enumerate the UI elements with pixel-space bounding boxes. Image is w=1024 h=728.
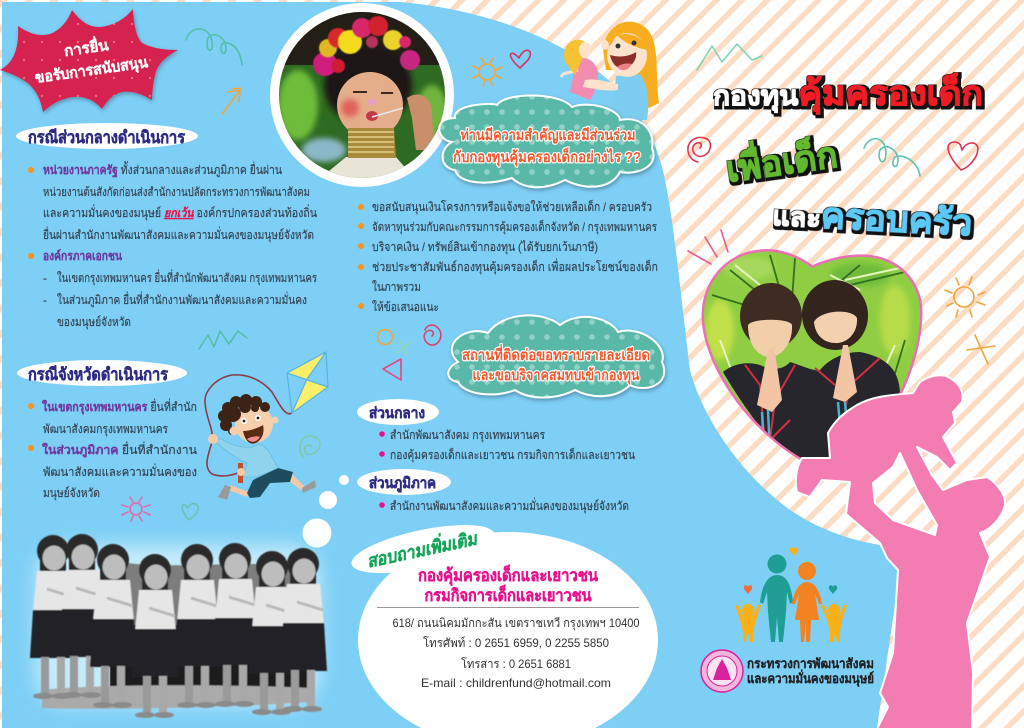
title: เพื่อเด็ก — [723, 129, 840, 190]
photo: girl with flower crown blowing bubbles — [270, 3, 454, 187]
doodles: sun and heart — [122, 436, 320, 521]
title: กองทุนคุ้มครองเด็ก — [713, 72, 983, 115]
doodles: sun and heart top — [473, 50, 530, 86]
text block: provincial list: พัฒนาสังคมกรุงเทพมหานคร — [43, 422, 168, 437]
cloud: how can you participate — [439, 95, 654, 187]
text block: central agency list: ของมนุษย์จังหวัด — [57, 315, 131, 330]
cloud: how can you participate: ท่านมีความสำคัญและมีส่วนร่วม — [460, 127, 636, 144]
cloud: contact place: สถานที่ติดต่อขอทราบรายละเอียด — [462, 344, 650, 364]
text block: ways to participate: ช่วยประชาสัมพันธ์กองทุนคุ้มครองเด็ก เพื่อผลประโยชน์ของเด็ก — [372, 258, 658, 275]
pill heading: central — [357, 399, 439, 425]
text block: provincial list: มนุษย์จังหวัด — [43, 486, 100, 501]
father — [760, 554, 793, 642]
text block: central agency list — [28, 161, 317, 330]
doodle: top green zigzag — [697, 44, 762, 70]
pill heading: central agency: กรณีส่วนกลางดำเนินการ — [28, 127, 186, 147]
contact details — [392, 616, 640, 690]
contact title: กรมกิจการเด็กและเยาวชน — [424, 583, 592, 605]
text block: central offices: สำนักพัฒนาสังคม กรุงเทพมหานคร — [390, 428, 545, 443]
text block: provincial list: ในเขตกรุงเทพมหานคร ยื่นที่สำนัก — [42, 398, 197, 415]
silhouette: parent lifting child — [796, 375, 1005, 728]
contact details: โทรศัพท์ : 0 2651 6959, 0 2255 5850 — [423, 636, 609, 650]
text block: central offices: กองคุ้มครองเด็กและเยาวชน กรมกิจการเด็กและเยาวชน — [390, 447, 635, 463]
burst badge: application heading: การยื่น — [63, 34, 110, 60]
pill heading: regional — [357, 469, 451, 495]
text block: central agency list: ในส่วนภูมิภาค ยื่นที่สำนักงานพัฒนาสังคมและความมั่นคง — [57, 291, 307, 308]
contact details: โทรสาร : 0 2651 6881 — [461, 657, 571, 671]
text block: central agency list: - — [43, 293, 47, 307]
pill heading: central agency — [16, 123, 198, 149]
contact details: 618/ ถนนนิคมมักกะสัน เขตราชเทวี กรุงเทพฯ 10400 — [392, 616, 640, 631]
photo: children in school uniform — [30, 534, 327, 718]
text block: central agency list: และความมั่นคงของมนุษย์ ยกเว้น องค์กรปกครองส่วนท้องถิ่น — [43, 204, 317, 221]
ministry name: กระทรวงการพัฒนาสังคม — [747, 656, 874, 671]
doodles: circle, cross, spiral, triangle — [378, 325, 441, 380]
text block: ways to participate: ในภาพรวม — [372, 280, 421, 294]
doodles: right spiral, coil, heart, rays, sun, cross — [688, 137, 995, 364]
family icon — [735, 547, 847, 642]
doodle: green zigzag — [199, 331, 247, 349]
pill heading: provincial: กรณีจังหวัดดำเนินการ — [28, 364, 169, 384]
text block: regional office: สำนักงานพัฒนาสังคมและความมั่นคงของมนุษย์จังหวัด — [390, 497, 629, 514]
ministry name — [747, 656, 874, 687]
text block: ways to participate: ขอสนับสนุนเงินโครงการหรือแจ้งขอให้ช่วยเหลือเด็ก / ครอบครัว — [372, 199, 652, 215]
tag: further enquiries: สอบถามเพิ่มเติม — [364, 525, 480, 572]
contact details: E-mail : childrenfund@hotmail.com — [421, 676, 611, 690]
text block: ways to participate — [358, 199, 658, 314]
title — [713, 72, 983, 243]
photo: two girls in heart frame — [700, 250, 925, 465]
text block: provincial list: พัฒนาสังคมและความมั่นคงของ — [43, 463, 197, 479]
tag: further enquiries — [348, 515, 498, 583]
pill heading: regional: ส่วนภูมิภาค — [369, 474, 436, 493]
text block: ways to participate: ให้ข้อเสนอแนะ — [372, 300, 439, 314]
doodles: left top — [186, 29, 242, 114]
text block: central offices — [379, 428, 635, 463]
text block: ways to participate: จัดหาทุนร่วมกับคณะกรรมการคุ้มครองเด็กจังหวัด / กรุงเทพมหานคร — [372, 219, 657, 235]
kite and running boy — [205, 352, 328, 500]
cloud: contact place — [448, 315, 664, 398]
text block: ways to participate: บริจาคเงิน / ทรัพย์สินเข้ากองทุน (ได้รับยกเว้นภาษี) — [372, 240, 598, 255]
text block: provincial list: ในส่วนภูมิภาค ยื่นที่สำนักงาน — [42, 441, 197, 458]
text block: central agency list: หน่วยงานภาครัฐ ทั้งส่วนกลางและส่วนภูมิภาค ยื่นผ่าน — [43, 161, 282, 178]
ministry name: และความมั่นคงของมนุษย์ — [747, 669, 874, 687]
text block: regional office — [379, 497, 629, 514]
pill heading: provincial — [17, 360, 187, 386]
text block: central agency list: หน่วยงานต้นสังกัดก่อนส่งสำนักงานปลัดกระทรวงการพัฒนาสังคม — [43, 185, 310, 199]
title: และครอบครัว — [772, 192, 973, 243]
text block: central agency list: องค์กรภาคเอกชน — [43, 249, 123, 263]
thought bubbles — [302, 475, 349, 548]
text block: central agency list: - — [43, 271, 47, 285]
text block: central agency list: ยื่นผ่านสำนักงานพัฒนาสังคมและความมั่นคงของมนุษย์จังหวัด — [43, 226, 314, 243]
contact title: กองคุ้มครองเด็กและเยาวชน — [418, 563, 598, 586]
cloud: contact place: และขอบริจาคสมทบเข้ากองทุน — [472, 366, 640, 385]
burst badge: application heading: ขอรับการสนับสนุน — [34, 54, 150, 88]
cartoon: girl lifting baby — [561, 22, 659, 120]
ministry seal — [701, 650, 743, 692]
burst badge: application heading — [0, 9, 178, 112]
pill heading: central: ส่วนกลาง — [369, 405, 425, 422]
children — [735, 604, 847, 642]
text block: central agency list: ในเขตกรุงเทพมหานคร ยื่นที่สำนักพัฒนาสังคม กรุงเทพมหานคร — [57, 269, 317, 286]
mother — [792, 562, 822, 642]
cloud: how can you participate: กับกองทุนคุ้มครองเด็กอย่างไร ?? — [453, 147, 641, 167]
text block: provincial list — [28, 398, 197, 501]
contact title — [377, 563, 639, 608]
hearts — [744, 547, 837, 594]
contact bubble — [348, 515, 658, 728]
